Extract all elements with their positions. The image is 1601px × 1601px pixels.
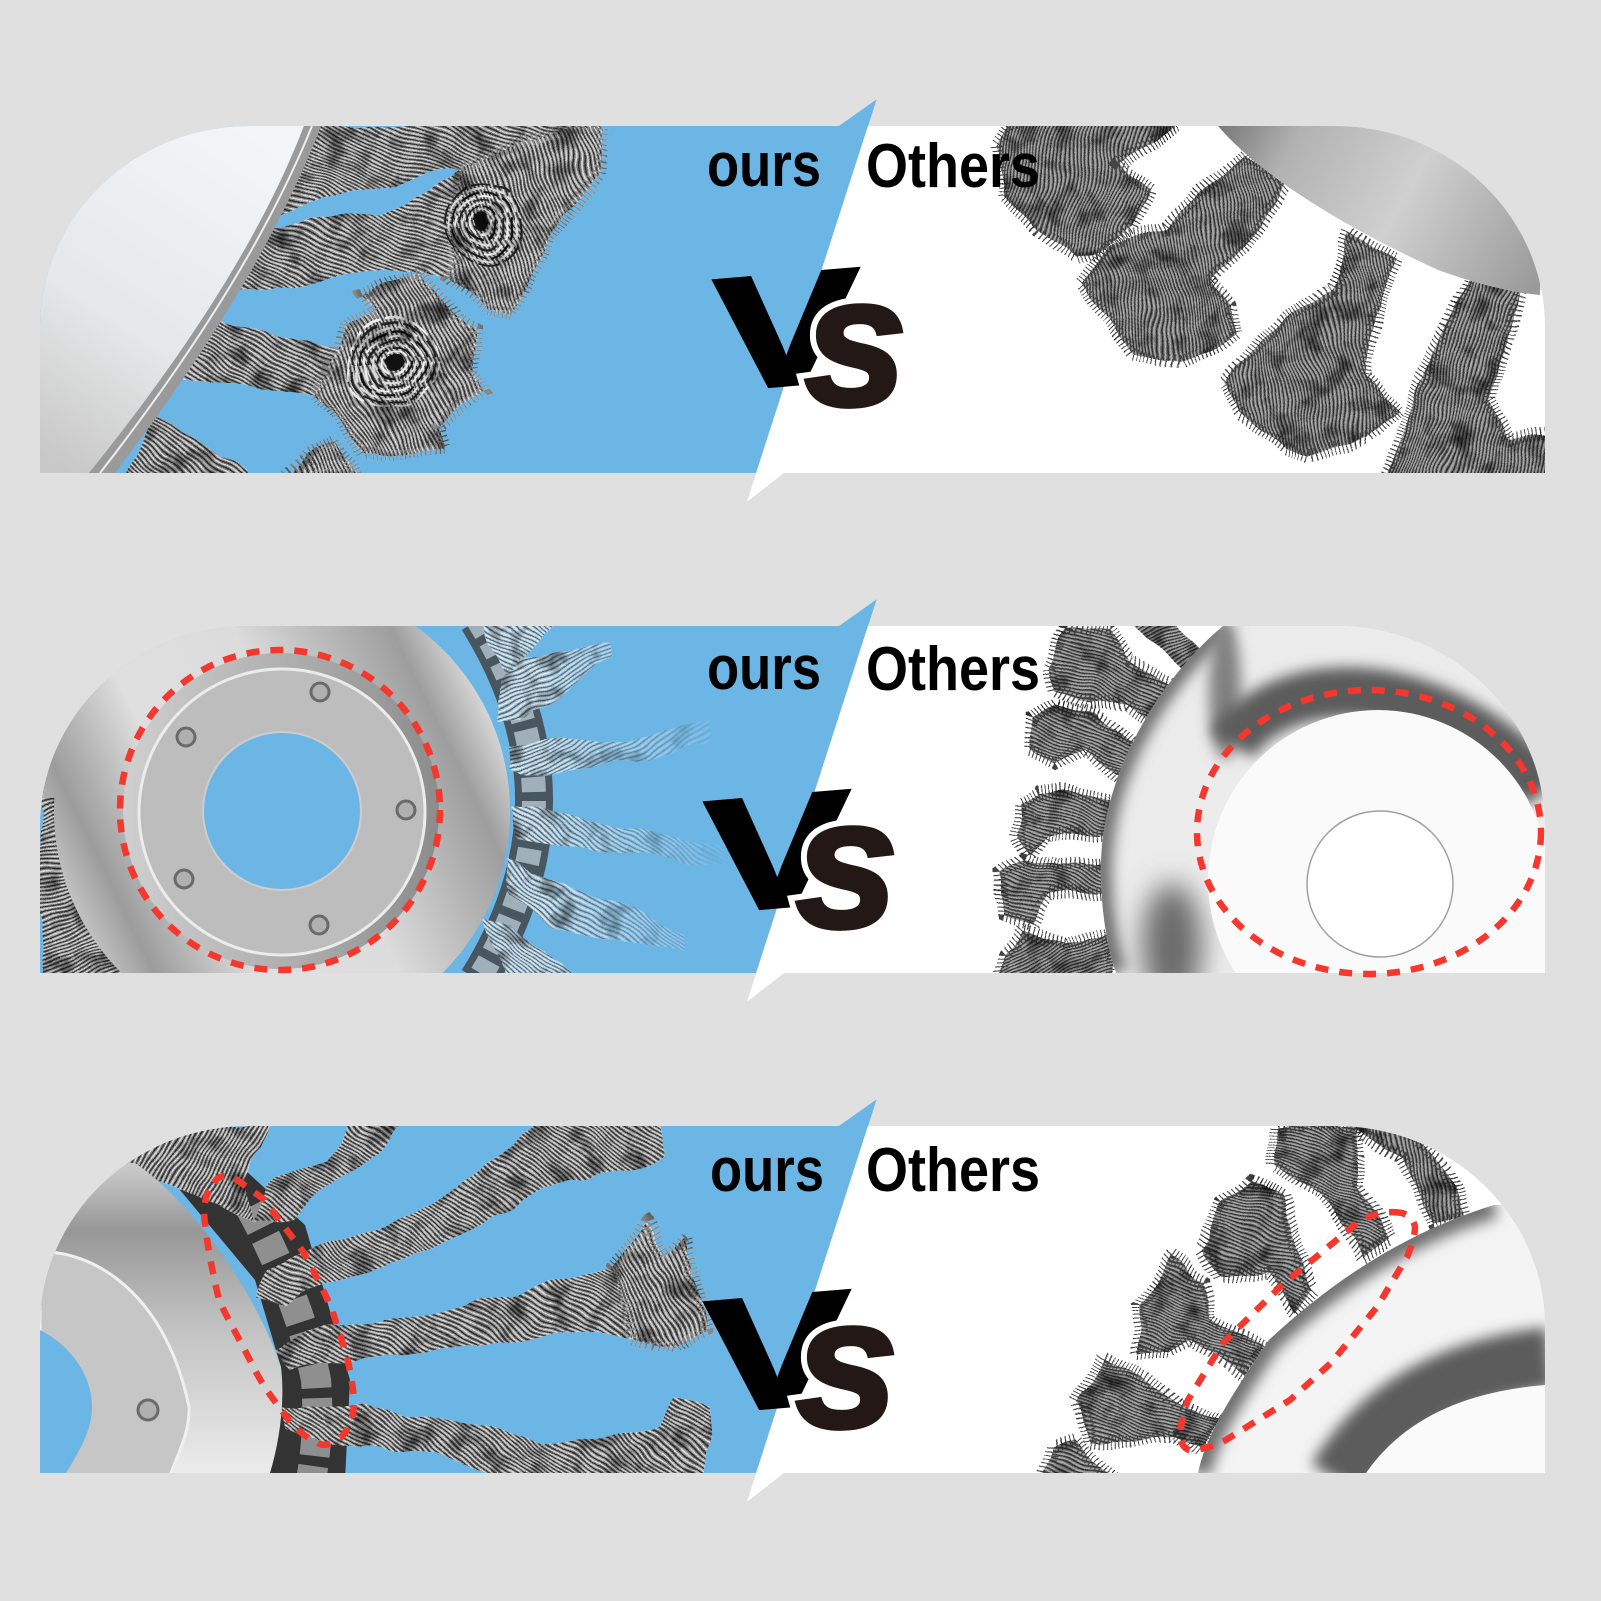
panel 3 ours brush photo [40, 1120, 712, 1490]
panel 1 vs badge: s [804, 238, 907, 445]
panel 2: center plate [40, 599, 1545, 1002]
panel 1 ours label: ours [707, 131, 821, 200]
panel 3: wire roots [40, 1099, 1550, 1502]
panel 1 ours brush photo [40, 120, 600, 490]
panel 2 ours label: ours [707, 634, 821, 703]
panel 1 others label: Others [866, 132, 1040, 201]
panel 3 others brush photo [1045, 1125, 1550, 1485]
panel 3 others label: Others [866, 1136, 1040, 1205]
panel 2 vs badge: s [795, 760, 898, 967]
panel 3 ours label: ours [710, 1136, 824, 1205]
panel 2 ours background [40, 599, 877, 973]
panel 2 vs badge: s [795, 760, 898, 967]
panel 2 others red dashed ellipse [1197, 690, 1541, 974]
panel 2 ours brush photo [40, 583, 730, 1039]
panel 3 vs badge: s [795, 1260, 898, 1467]
panel 2 vs badge: V [706, 757, 848, 946]
panel 1 vs badge: V [715, 235, 857, 424]
panel 2 others label: Others [866, 635, 1040, 704]
panel 3 ours red dashed loop [204, 1176, 354, 1445]
panel 1 vs badge: s [804, 238, 907, 445]
panel 2 others background [747, 626, 1545, 1002]
panel 1 others brush photo [999, 120, 1560, 490]
panel 1 ours background [40, 99, 877, 473]
panel 2 ours red dashed circle [120, 650, 440, 970]
panel 2 vs badge [706, 757, 898, 967]
panel 3 vs badge [706, 1257, 898, 1467]
panel 3 vs badge: V [706, 1257, 848, 1446]
disc [42, 626, 247, 798]
panel 3 vs badge: s [795, 1260, 898, 1467]
panel 1 vs badge [715, 235, 907, 445]
panel 2 others brush photo [992, 626, 1545, 973]
panel 3 others background [747, 1126, 1545, 1502]
panel 3 ours background [40, 1099, 877, 1473]
panel 3 others red dashed loop [1180, 1212, 1415, 1450]
panel 1 others background [747, 126, 1545, 502]
panel 1: wire ends [40, 99, 1560, 502]
